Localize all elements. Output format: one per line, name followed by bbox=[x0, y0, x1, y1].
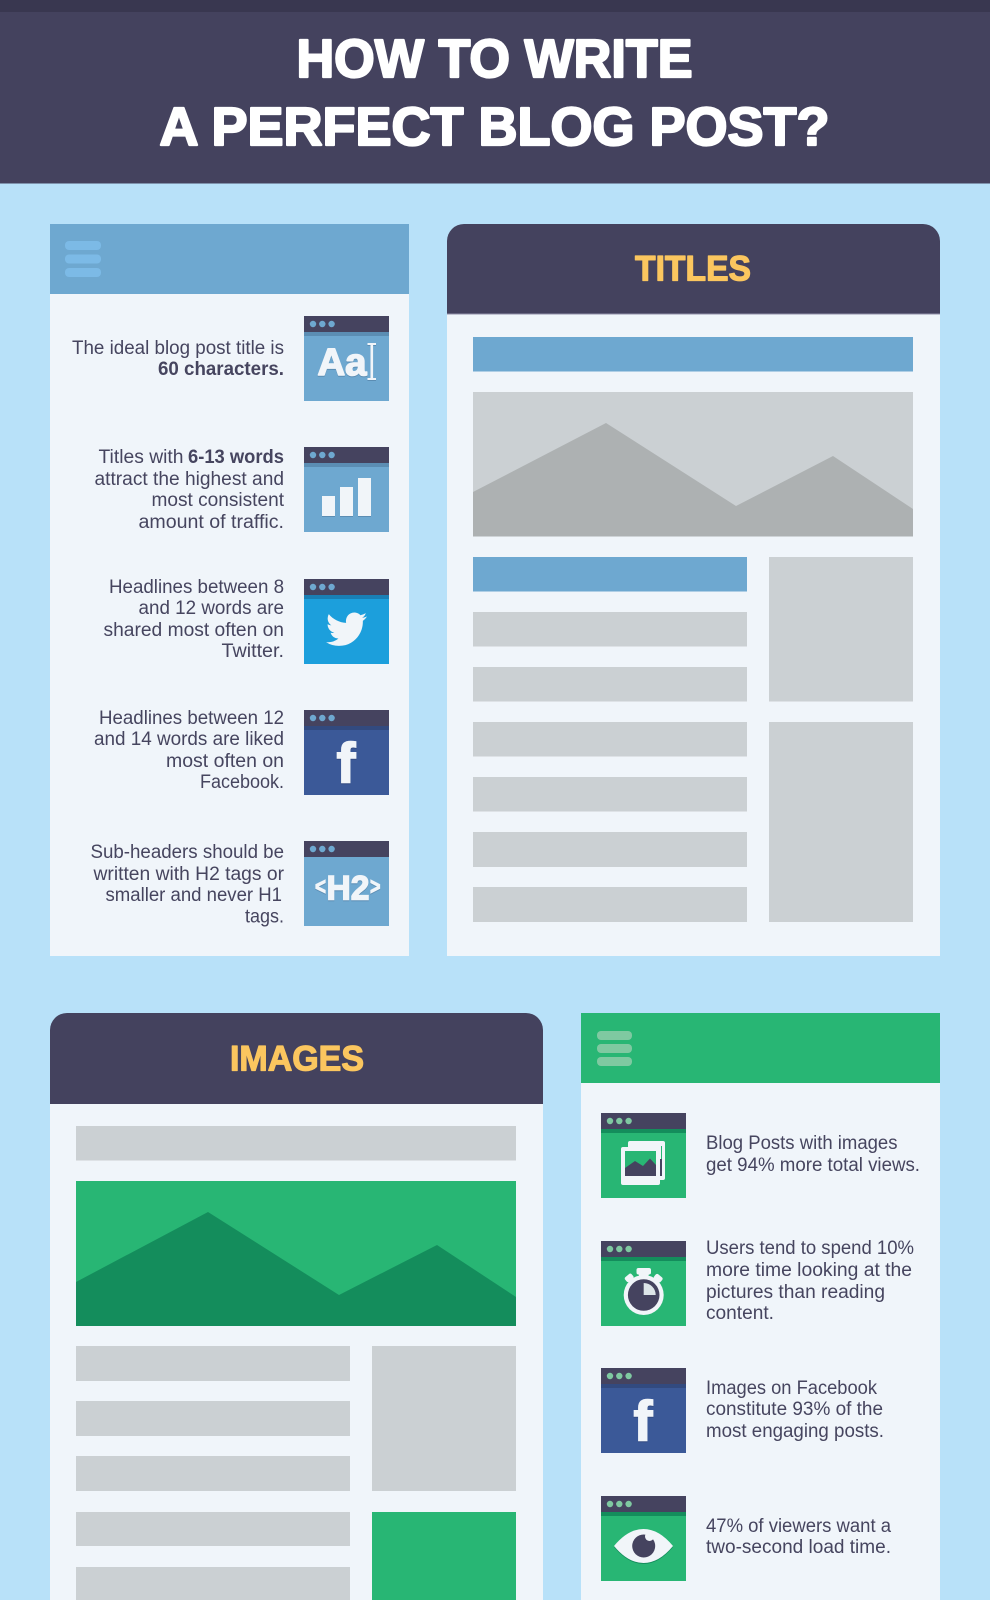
panel: images wireframe bbox=[50, 1013, 543, 1600]
text: facebook images: constitute 93% of the bbox=[706, 1399, 883, 1420]
icon: facebook bbox=[304, 710, 389, 796]
icon: facebook: f bbox=[336, 732, 356, 796]
heading: titles: TITLES bbox=[635, 249, 751, 288]
text: viewing time: pictures than reading bbox=[706, 1282, 885, 1303]
text: facebook headlines: and 14 words are liked bbox=[94, 729, 284, 750]
heading: images: IMAGES bbox=[230, 1039, 364, 1078]
text: viewing time: more time looking at the bbox=[706, 1260, 912, 1281]
text: title length bbox=[72, 338, 284, 380]
text: word count traffic: most consistent bbox=[152, 490, 285, 511]
image placeholder: mountains bbox=[473, 392, 913, 536]
header banner bbox=[0, 0, 990, 184]
text: images views: get 94% more total views. bbox=[706, 1155, 920, 1176]
text: viewing time bbox=[706, 1238, 914, 1324]
icon: menu bbox=[597, 1031, 632, 1066]
icon: twitter bbox=[304, 579, 389, 664]
text: word count traffic bbox=[94, 447, 285, 533]
icon: H2 tag bbox=[304, 841, 389, 926]
icon: facebook: f bbox=[634, 1390, 654, 1454]
text: facebook headlines: Facebook. bbox=[200, 772, 284, 793]
panel: titles tips bbox=[50, 224, 409, 956]
text: viewing time: content. bbox=[706, 1303, 774, 1324]
image placeholder: green mountains bbox=[76, 1181, 516, 1326]
icon: typography Aa: Aa bbox=[318, 342, 367, 384]
icon: H2 tag: < bbox=[315, 874, 326, 900]
icon: H2 tag: H2 bbox=[326, 870, 370, 908]
panel: images tips bbox=[581, 1013, 940, 1600]
panel: titles wireframe bbox=[447, 224, 940, 956]
text: sub-headers: smaller and never H1 bbox=[106, 885, 282, 906]
icon: typography Aa bbox=[304, 316, 389, 401]
text: facebook images bbox=[706, 1378, 884, 1442]
text: word count traffic: attract the highest and bbox=[94, 469, 284, 490]
text: load time bbox=[706, 1516, 891, 1558]
text: twitter headlines bbox=[104, 577, 284, 662]
text: sub-headers bbox=[90, 842, 285, 928]
title: HOW TO WRITE bbox=[296, 30, 692, 89]
text: twitter headlines: and 12 words are bbox=[138, 598, 284, 619]
text: viewing time: Users tend to spend 10% bbox=[706, 1238, 914, 1259]
text: twitter headlines: Twitter. bbox=[222, 641, 284, 662]
text: facebook headlines: most often on bbox=[166, 751, 284, 772]
text: facebook images: Images on Facebook bbox=[706, 1378, 877, 1399]
text: word count traffic: amount of traffic. bbox=[138, 512, 284, 533]
text: facebook headlines bbox=[94, 708, 284, 793]
text: images views: Blog Posts with images bbox=[706, 1133, 898, 1154]
icon: bar chart bbox=[304, 447, 389, 532]
icon: facebook bbox=[601, 1368, 686, 1454]
title bbox=[160, 30, 830, 157]
heading: images bbox=[50, 1013, 543, 1104]
title: A PERFECT BLOG POST? bbox=[160, 98, 830, 157]
text: load time: 47% of viewers want a bbox=[706, 1516, 891, 1537]
text: load time: two-second load time. bbox=[706, 1537, 891, 1558]
icon: eye bbox=[601, 1496, 686, 1581]
text: images views bbox=[706, 1133, 920, 1176]
text: twitter headlines: shared most often on bbox=[104, 620, 284, 641]
text: title length: 60 characters. bbox=[158, 359, 284, 380]
text: facebook images: most engaging posts. bbox=[706, 1421, 884, 1442]
text: word count traffic: 6-13 words bbox=[188, 447, 284, 468]
icon: photos bbox=[601, 1113, 686, 1198]
text: sub-headers: written with H2 tags or bbox=[92, 864, 285, 885]
icon: H2 tag: > bbox=[370, 874, 380, 900]
text: title length: The ideal blog post title is bbox=[72, 338, 284, 359]
text: sub-headers: Sub-headers should be bbox=[90, 842, 284, 863]
text: twitter headlines: Headlines between 8 bbox=[109, 577, 284, 598]
text: facebook headlines: Headlines between 12 bbox=[99, 708, 284, 729]
heading: titles bbox=[447, 224, 940, 314]
icon: stopwatch bbox=[601, 1241, 686, 1326]
text: word count traffic: Titles with bbox=[98, 447, 184, 468]
text: sub-headers: tags. bbox=[245, 906, 284, 928]
icon: menu bbox=[65, 241, 101, 277]
